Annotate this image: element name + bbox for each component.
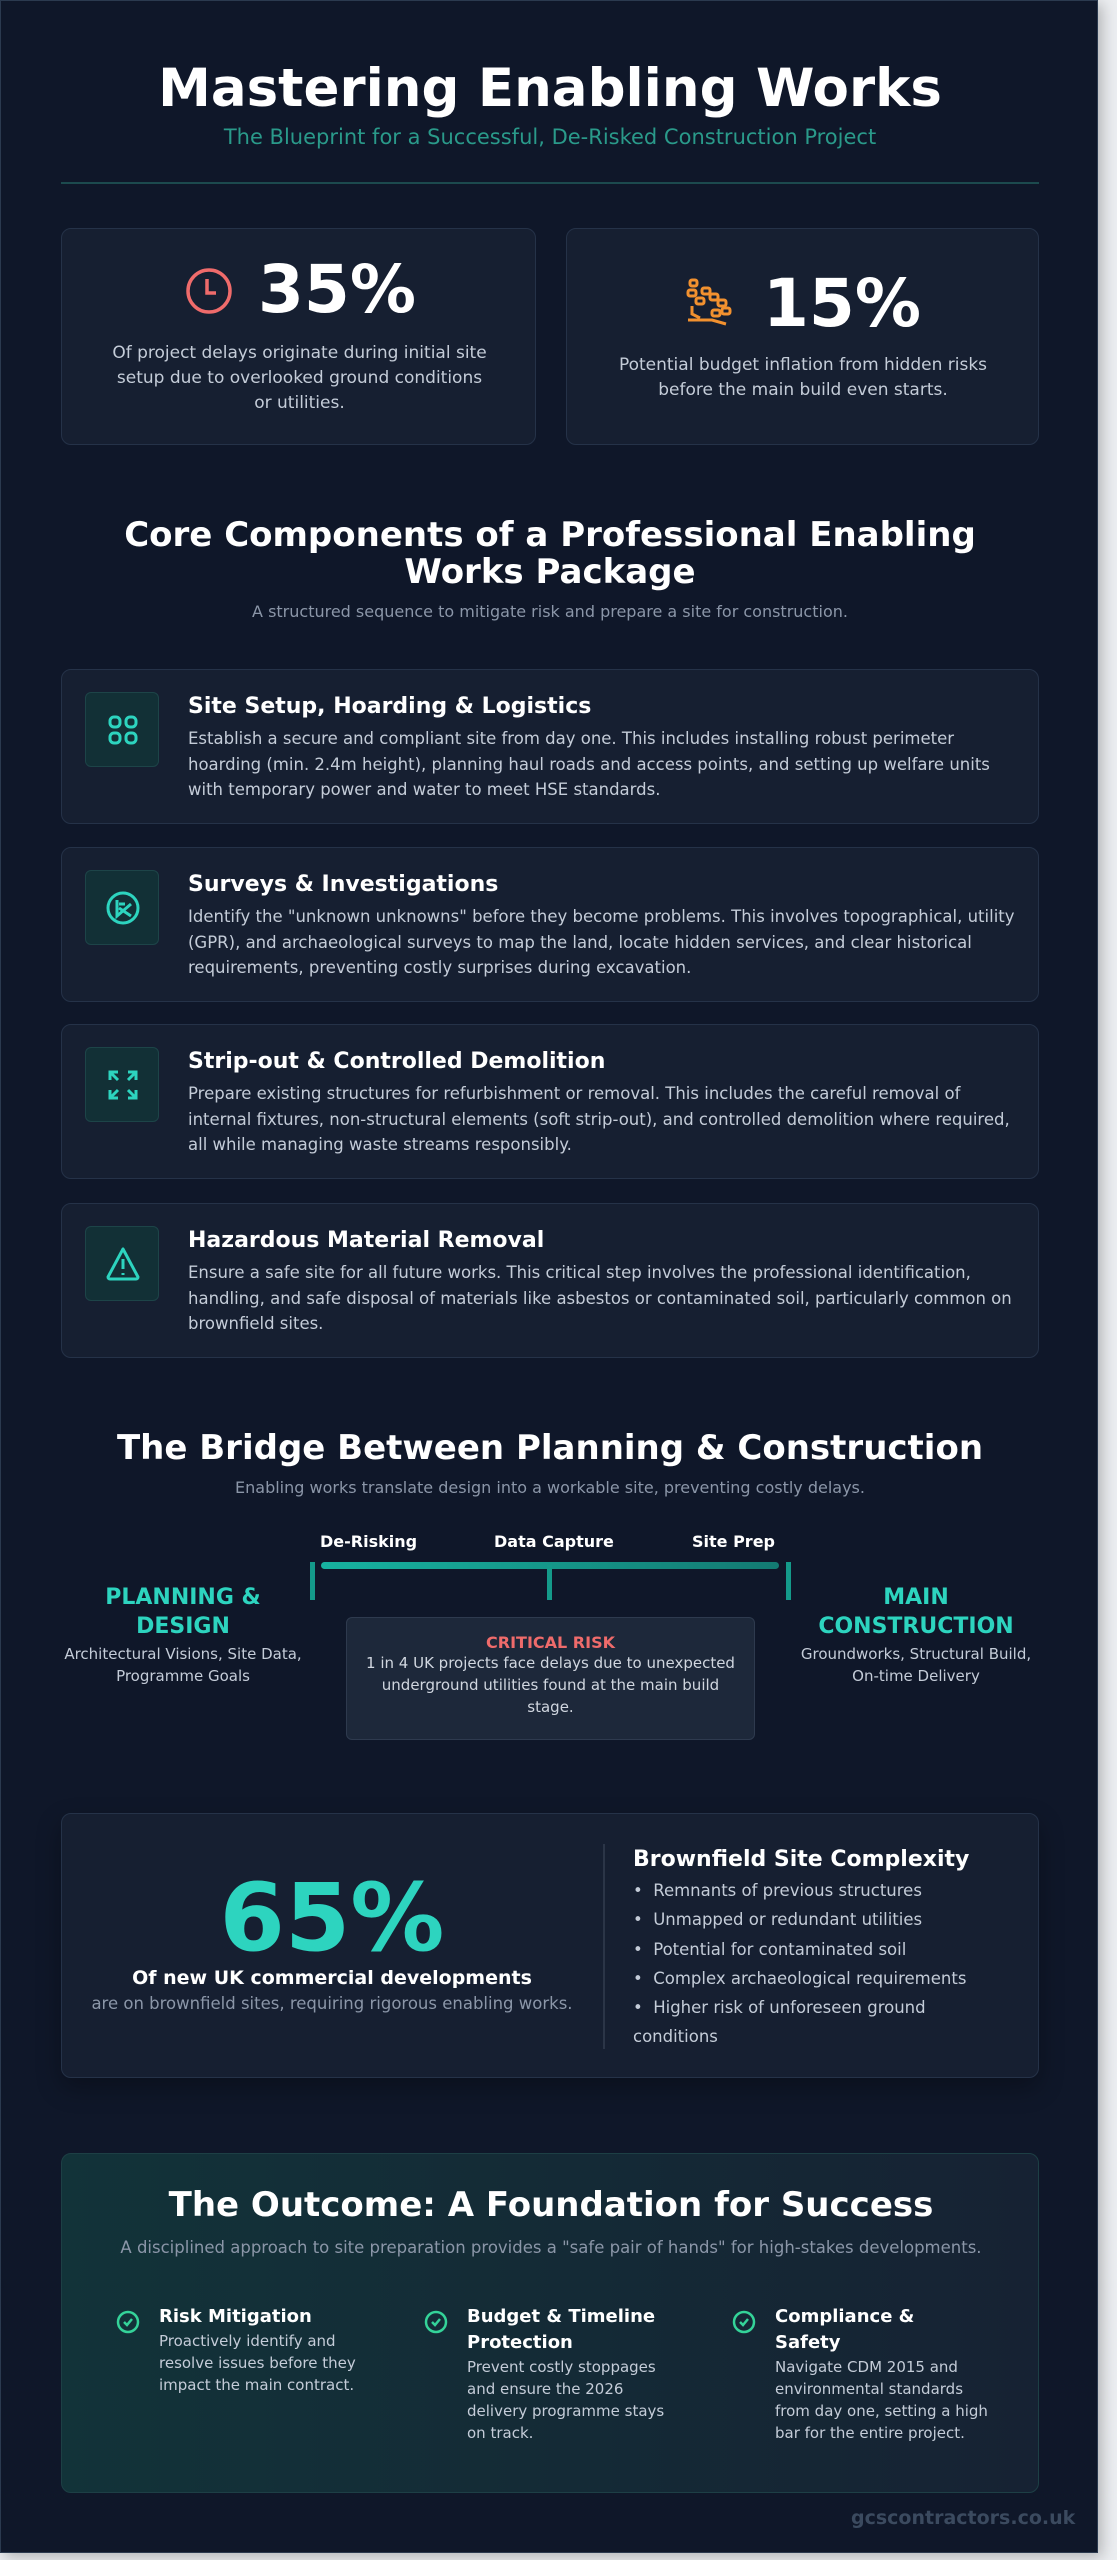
component: surveys: Identify the "unknown unknowns" before they become problems. This involves topographical, utility (GPR), and archaeological surveys to map the land, locate hidden services, and clear historical requirements, preventing costly surprises during excavation. — [188, 907, 1015, 977]
stat card: 35% — [61, 228, 536, 445]
phase labels — [320, 1532, 775, 1551]
panel: brownfield stat: are on brownfield sites, requiring rigorous enabling works. — [91, 1994, 573, 2013]
phase labels: Site Prep — [692, 1532, 775, 1551]
critical risk callout: CRITICAL RISK — [486, 1633, 615, 1652]
phase labels: De-Risking — [320, 1532, 417, 1551]
brownfield list: • Unmapped or redundant utilities — [633, 1910, 922, 1929]
outcome: budget: Budget & Timeline Protection — [467, 2306, 655, 2353]
component: strip-out: Strip-out & Controlled Demolition — [188, 1049, 605, 1074]
heading: core components: Core Components of a Professional Enabling Works Package — [124, 515, 976, 592]
outcome subheading: A disciplined approach to site preparation provides a "safe pair of hands" for high-stakes developments. — [120, 2238, 982, 2257]
component: site setup: Site Setup, Hoarding & Logistics — [188, 694, 591, 719]
component: hazardous — [61, 1203, 1039, 1358]
bridge diagram — [64, 1532, 1031, 1740]
component: surveys — [61, 847, 1039, 1002]
stat description: Potential budget inflation from hidden risks before the main build even starts. — [619, 355, 987, 400]
outcome: compliance: Navigate CDM 2015 and environmental standards from day one, setting a high bar for the entire project. — [775, 2358, 988, 2442]
outcome: compliance — [732, 2306, 988, 2442]
icon: expand arrows — [85, 1047, 159, 1122]
outcome: risk mitigation: Risk Mitigation — [159, 2306, 312, 2327]
main construction: MAIN — [883, 1585, 949, 1610]
subtitle: The Blueprint for a Successful, De-Risked Construction Project — [224, 125, 876, 149]
component: strip-out: Prepare existing structures for refurbishment or removal. This includes the careful removal of internal fixtures, non-structural elements (soft strip-out), and controlled demolition where required, all while managing waste streams responsibly. — [188, 1084, 1010, 1154]
component: hazardous: Hazardous Material Removal — [188, 1228, 544, 1253]
icon: grid — [85, 692, 159, 767]
footer brand: gcscontractors.co.uk — [851, 2507, 1075, 2529]
panel: brownfield stat — [61, 1813, 1039, 2078]
stat description: Of project delays originate during initial site setup due to overlooked ground conditions or utilities. — [112, 343, 487, 413]
icon: warning — [85, 1226, 159, 1301]
planning & design: Programme Goals — [116, 1667, 250, 1685]
component: hazardous: Ensure a safe site for all future works. This critical step involves the professional identification, handling, and safe disposal of materials like asbestos or contaminated soil, particularly common on brownfield sites. — [188, 1263, 1012, 1333]
title: Mastering Enabling Works — [158, 58, 942, 119]
planning & design — [64, 1585, 302, 1685]
component: surveys: Surveys & Investigations — [188, 872, 498, 897]
icon: survey — [85, 870, 159, 945]
phase labels: Data Capture — [494, 1532, 614, 1551]
brownfield list: • Potential for contaminated soil — [633, 1940, 906, 1959]
planning & design: Architectural Visions, Site Data, — [64, 1645, 302, 1663]
heading: bridge: The Bridge Between Planning & Construction — [117, 1428, 983, 1468]
stat card: 15% — [566, 228, 1039, 445]
critical risk callout: 1 in 4 UK projects face delays due to unexpected underground utilities found at the main build stage. — [366, 1654, 735, 1716]
main construction — [801, 1585, 1031, 1685]
subheading: A structured sequence to mitigate risk and prepare a site for construction. — [252, 602, 848, 621]
brownfield list: • Remnants of previous structures — [633, 1881, 922, 1900]
bridge bar — [321, 1562, 779, 1569]
outcome: compliance: Compliance & Safety — [775, 2306, 914, 2353]
main construction: Groundworks, Structural Build, — [801, 1645, 1031, 1663]
planning & design: PLANNING & — [105, 1585, 261, 1610]
main construction: On-time Delivery — [852, 1667, 980, 1685]
icon: coins — [686, 278, 732, 326]
icon: clock — [186, 268, 232, 314]
brownfield list: • Higher risk of unforeseen ground — [633, 1998, 926, 2017]
main construction: CONSTRUCTION — [818, 1614, 1014, 1639]
critical risk callout — [346, 1617, 755, 1740]
stat caption: Of new UK commercial developments — [132, 1967, 532, 1989]
brownfield list: conditions — [633, 2027, 718, 2046]
outcome heading: The Outcome: A Foundation for Success — [169, 2185, 933, 2225]
bridge subheading: Enabling works translate design into a workable site, preventing costly delays. — [235, 1478, 865, 1497]
outcome: budget: Prevent costly stoppages and ensure the 2026 delivery programme stays on track. — [467, 2358, 664, 2442]
brownfield list: • Complex archaeological requirements — [633, 1969, 966, 1988]
planning & design: DESIGN — [136, 1614, 230, 1639]
brownfield list — [633, 1847, 969, 2046]
stat number: 35% — [258, 251, 416, 328]
outcome: risk mitigation — [116, 2306, 356, 2394]
component: site setup — [61, 669, 1039, 824]
component: site setup: Establish a secure and compliant site from day one. This includes installing robust perimeter hoarding (min. 2.4m height), planning haul roads and access points, and setting up welfare units with temporary power and water to meet HSE standards. — [188, 729, 990, 799]
outcome: budget — [424, 2306, 664, 2442]
outcome: risk mitigation: Proactively identify and resolve issues before they impact the main contract. — [159, 2332, 356, 2394]
panel: outcome — [61, 2153, 1039, 2493]
big stat 65%: 65% — [220, 1864, 444, 1973]
brownfield list: Brownfield Site Complexity — [633, 1847, 969, 1872]
component: strip-out — [61, 1024, 1039, 1179]
stat number: 15% — [763, 265, 921, 342]
